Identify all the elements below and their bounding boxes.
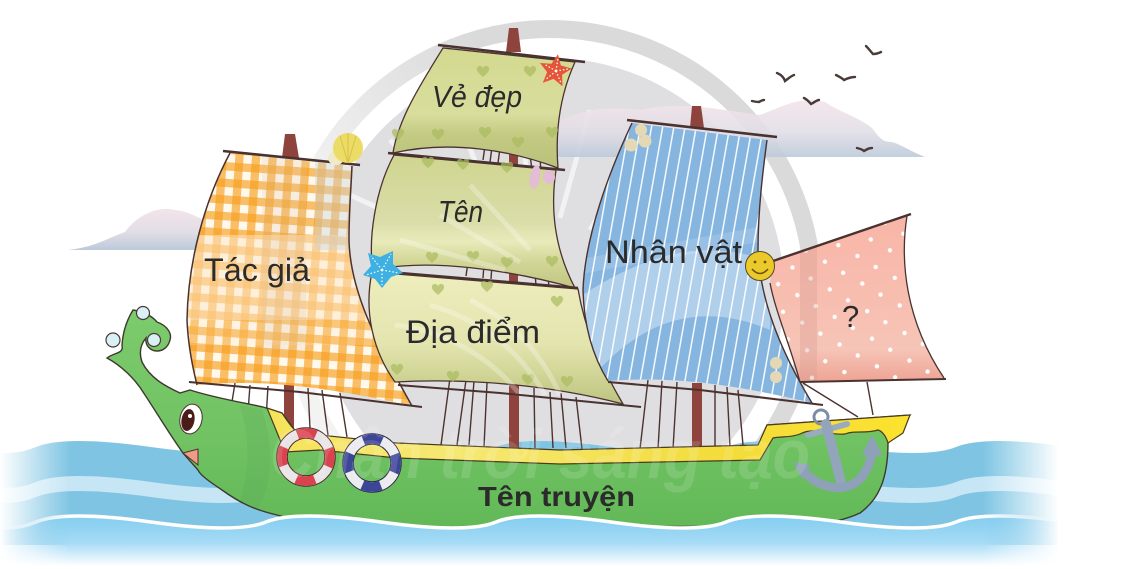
decoration: blue starfish: [363, 251, 403, 288]
birds: [752, 46, 881, 151]
sail: top green, beauty: [393, 45, 585, 168]
decoration: pink shells: [528, 164, 555, 190]
watermark: publisher wordmark: Chân trời sáng tạo: [270, 415, 810, 493]
lifebuoy: red: [282, 433, 330, 481]
label: name: Tên: [438, 194, 483, 229]
eye: [177, 402, 205, 436]
decoration: shell on orange sail: [328, 133, 363, 165]
water: wave bands behind the hull: [0, 441, 1127, 545]
cloud: right horizon: [545, 100, 925, 157]
yellow deck rail: [267, 408, 910, 464]
label: author: Tác giả: [204, 252, 310, 288]
decoration: beige spots on blue sail bottom: [770, 357, 782, 383]
sail: middle green, name: [371, 153, 575, 288]
label: beauty: Vẻ đẹp: [432, 79, 522, 114]
decoration: beige spots on blue sail top: [624, 124, 652, 152]
hearts on green sails: [391, 66, 573, 387]
prow balls: [106, 306, 160, 347]
label: question mark: ?: [842, 299, 859, 334]
label: story title on hull: Tên truyện: [478, 481, 635, 512]
anchor: [796, 410, 880, 488]
watermark: sun rays across the green sails: [395, 185, 560, 395]
cloud: left horizon: [68, 209, 240, 250]
decoration: red starfish: [540, 54, 572, 86]
sail: pink dotted, question: [769, 212, 946, 383]
label: character: Nhân vật: [605, 234, 742, 270]
masts: three wooden masts: [282, 28, 704, 450]
label: place: Địa điểm: [406, 314, 540, 350]
water: white crest line and lower foam: [6, 514, 1054, 564]
sail: bottom green, place: [369, 272, 641, 407]
rigging: ropes between sails and deck: [231, 146, 873, 449]
sail: blue striped, character: [575, 120, 823, 405]
watermark: circular emblem behind the ship: [287, 29, 813, 555]
sail: orange plaid, author: [180, 150, 422, 407]
hull shading: [240, 405, 270, 508]
lifebuoy: blue: [348, 439, 396, 487]
mouth: [183, 449, 198, 465]
decoration: yellow smiley: [746, 252, 774, 280]
hull: green boat with prow: [107, 310, 910, 528]
